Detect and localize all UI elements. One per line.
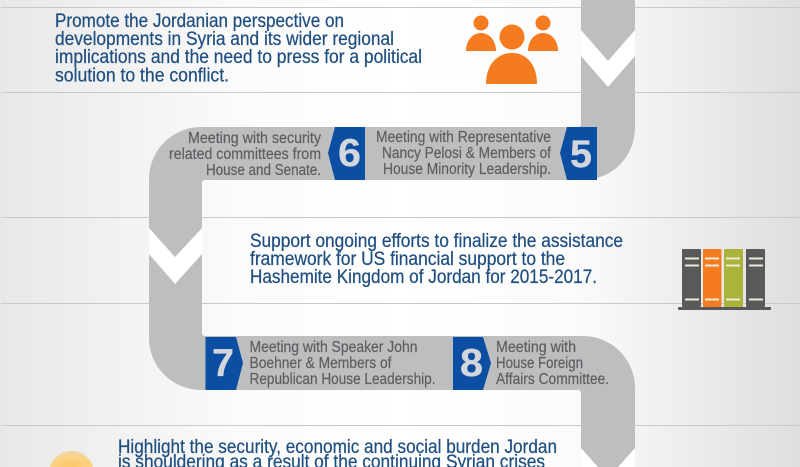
step 6: 6 <box>338 132 361 175</box>
text: promote Jordanian perspective: developments in Syria and its wider regional <box>55 28 394 50</box>
step 6: Meeting with security <box>188 130 321 147</box>
text: promote Jordanian perspective: Promote the Jordanian perspective on <box>55 10 344 32</box>
step 7: Meeting with Speaker John <box>250 339 418 356</box>
step 8: 8 <box>460 342 483 385</box>
step 8: Affairs Committee. <box>496 371 609 388</box>
step 5: House Minority Leadership. <box>383 161 551 178</box>
text: assistance framework: Support ongoing efforts to finalize the assistance <box>250 230 623 252</box>
text: assistance framework <box>250 230 623 288</box>
step 5: Meeting with Representative <box>376 129 551 146</box>
icon: light bulb <box>50 451 93 467</box>
text: promote Jordanian perspective <box>55 10 422 86</box>
winding path <box>149 0 635 467</box>
text: security burden: Highlight the security, economic and social burden Jordan <box>118 436 557 458</box>
icon: books <box>678 249 771 310</box>
step 5 <box>376 127 597 180</box>
text: assistance framework: Hashemite Kingdom of Jordan for 2015-2017. <box>250 266 597 288</box>
step 8 <box>453 337 609 390</box>
step 8: Meeting with <box>496 339 576 356</box>
step 7: Boehner & Members of <box>250 355 392 372</box>
step 7: 7 <box>212 342 234 385</box>
step 5: 5 <box>570 133 592 176</box>
text: assistance framework: framework for US financial support to the <box>250 248 565 270</box>
step 7: Republican House Leadership. <box>250 371 436 388</box>
step 8: House Foreign <box>496 355 583 372</box>
step 6: related committees from <box>169 146 321 163</box>
step 6: House and Senate. <box>206 162 321 179</box>
icon: people <box>466 16 558 84</box>
step 7 <box>206 337 436 390</box>
text: promote Jordanian perspective: solution to the conflict. <box>55 64 229 86</box>
text: security burden <box>118 436 557 467</box>
step 5: Nancy Pelosi & Members of <box>382 145 552 162</box>
step 6 <box>169 127 365 180</box>
text: promote Jordanian perspective: implications and the need to press for a political <box>55 46 422 68</box>
